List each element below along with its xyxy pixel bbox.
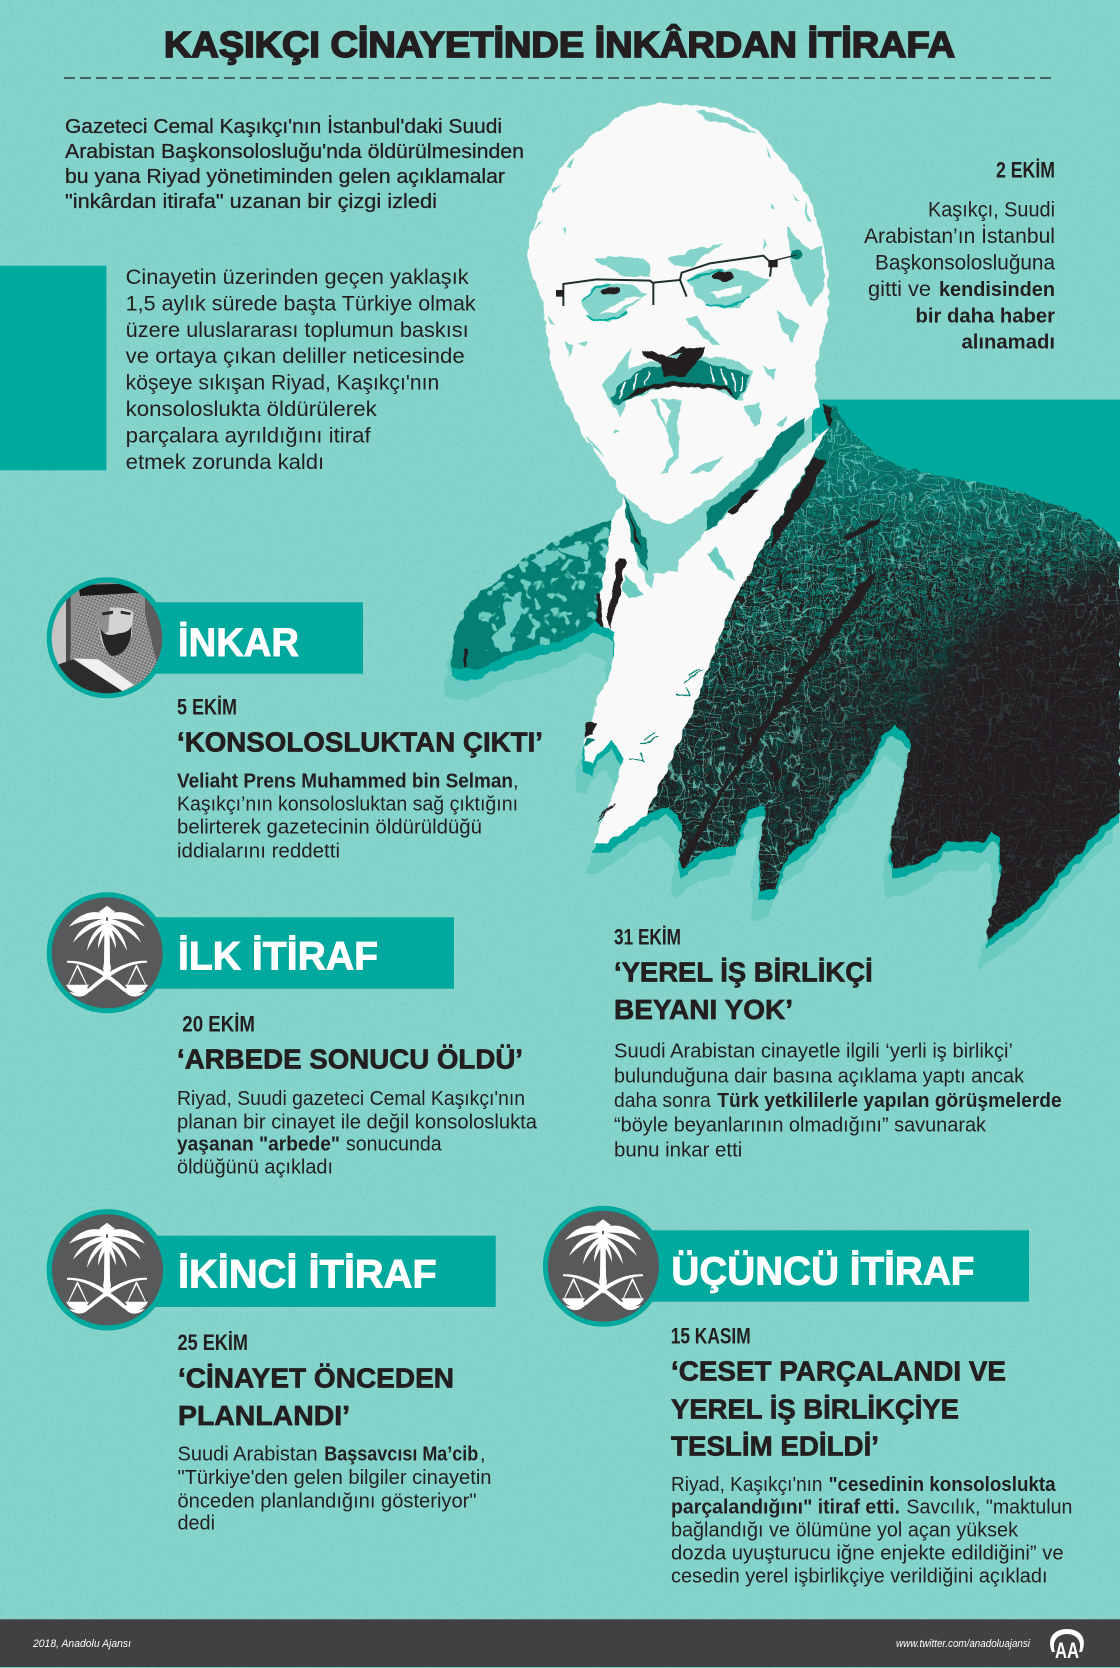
nose [643, 347, 707, 377]
body: daha sonra [614, 1090, 712, 1112]
body: "Türkiye'den gelen bilgiler cinayetin [178, 1467, 492, 1489]
section: ikinci itiraf [47, 1209, 496, 1534]
body: cesedin yerel işbirlikçiye verildiğini açıkladı [671, 1565, 1048, 1587]
body: öldüğünü açıkladı [177, 1156, 333, 1178]
eyes and temple [601, 271, 734, 295]
2 EKIM block: Kaşıkçı, Suudi [928, 199, 1055, 222]
lead paragraph: konsoloslukta öldürülerek [126, 398, 377, 421]
ucuncu itiraf heading: ÜÇÜNCÜ İTİRAF [671, 1248, 974, 1293]
section: ucuncu itiraf [543, 1206, 1072, 1587]
2 EKIM block: alınamadı [962, 332, 1055, 354]
url: www.twitter.com/anadoluajansi [896, 1638, 1030, 1650]
body: dozda uyuşturucu iğne enjekte edildiğini” ve [671, 1542, 1064, 1564]
ilk itiraf banner [150, 917, 454, 989]
body: Savcılık, "maktulun [906, 1496, 1072, 1518]
subheading: YEREL İŞ BİRLİKÇİYE [671, 1393, 959, 1424]
lead paragraph: ve ortaya çıkan deliller neticesinde [126, 345, 465, 368]
title: KAŞIKÇI CİNAYETİNDE İNKÂRDAN İTİRAFA [164, 23, 955, 65]
lead paragraph: etmek zorunda kaldı [126, 451, 324, 474]
AA logo [1050, 1629, 1084, 1663]
body [614, 1041, 1062, 1162]
emblem badge [47, 892, 168, 1013]
subheading: PLANLANDI’ [178, 1400, 350, 1431]
lens shading [582, 269, 750, 320]
2 EKIM block: kendisinden [939, 279, 1055, 301]
portrait painted layers [444, 104, 1120, 970]
ikinci itiraf heading: İKİNCİ İTİRAF [178, 1252, 437, 1296]
jacket left [452, 520, 612, 671]
body: , [513, 771, 519, 793]
body: dedi [178, 1512, 215, 1534]
date: 25 EKİM [178, 1330, 248, 1355]
subheading: ‘CESET PARÇALANDI VE [671, 1356, 1006, 1387]
body: parçalandığını" itiraf etti. [671, 1496, 900, 1518]
teal block left [0, 266, 106, 470]
emblem badge [47, 1209, 168, 1331]
face shading [533, 110, 825, 475]
subheading: ‘YEREL İŞ BİRLİKÇİ [614, 957, 873, 988]
2 EKIM block: Başkonsolosluğuna [875, 251, 1055, 274]
shirt logo marks [597, 669, 702, 822]
intro text: Arabistan Başkonsolosluğu'nda öldürülmesinden [65, 141, 524, 163]
body [177, 771, 519, 863]
inkar portrait badge [47, 577, 168, 703]
footer [0, 1619, 1120, 1667]
date: 20 EKİM [182, 1012, 255, 1037]
section: 31 ekim [614, 924, 1062, 1162]
intro text: Gazeteci Cemal Kaşıkçı'nın İstanbul'daki Suudi [65, 115, 502, 138]
2 EKIM block: bir daha haber [916, 306, 1055, 328]
body: Riyad, Suudi gazeteci Cemal Kaşıkçı'nın [177, 1088, 525, 1110]
inkar heading: İNKAR [178, 621, 299, 665]
moustache [610, 362, 750, 407]
body: , [480, 1444, 486, 1466]
inkar banner [150, 602, 363, 674]
body: Veliaht Prens Muhammed bin Selman [177, 771, 513, 793]
emblem badge [543, 1206, 664, 1327]
section: ilk itiraf [47, 892, 538, 1178]
subheading: BEYANI YOK’ [614, 994, 793, 1025]
body: Suudi Arabistan [178, 1444, 318, 1466]
lead paragraph [126, 266, 476, 474]
neck shadow [706, 416, 805, 532]
body: Türk yetkililerle yapılan görüşmelerde [717, 1090, 1062, 1112]
ucuncu itiraf banner [646, 1230, 1029, 1302]
ilk itiraf heading: İLK İTİRAF [178, 934, 378, 978]
date: 5 EKİM [177, 694, 237, 719]
2 EKIM block: gitti ve [868, 278, 931, 301]
body: planan bir cinayet ile değil konsoloslukta [177, 1111, 538, 1133]
under-eye highlights [598, 285, 743, 427]
ikinci itiraf banner [150, 1236, 496, 1307]
body: "cesedinin konsoloslukta [829, 1474, 1056, 1496]
AA logo: AA [1055, 1638, 1079, 1663]
teal block right behind shoulder [812, 400, 1120, 542]
subheading: ‘ARBEDE SONUCU ÖLDÜ’ [177, 1043, 523, 1074]
lead paragraph: üzere uluslararası toplumun baskısı [126, 319, 469, 342]
portrait shadows [444, 414, 1119, 970]
intro text: "inkârdan itirafa" uzanan bir çizgi izledi [65, 191, 437, 213]
intro text: bu yana Riyad yönetiminden gelen açıklamalar [65, 166, 505, 188]
body: bağlandığı ve ölümüne yol açan yüksek [671, 1520, 1019, 1542]
body: Riyad, Kaşıkçı'nın [671, 1474, 822, 1496]
2 EKIM block [864, 158, 1055, 354]
subheading: TESLİM EDİLDİ’ [671, 1431, 879, 1462]
subheading [671, 1356, 1006, 1462]
body [177, 1088, 538, 1178]
subheading [178, 1362, 454, 1431]
body [178, 1444, 492, 1534]
subheading [614, 957, 873, 1025]
lead paragraph: Cinayetin üzerinden geçen yaklaşık [126, 266, 469, 289]
lead paragraph: köşeye sıkışan Riyad, Kaşıkçı'nın [126, 372, 439, 394]
glasses [556, 255, 797, 306]
body: bulunduğuna dair basına açıklama yaptı ancak [614, 1065, 1025, 1087]
head [528, 104, 828, 525]
body: bunu inkar etti [614, 1140, 742, 1162]
2 EKIM block: 2 EKİM [996, 158, 1055, 183]
credit: 2018, Anadolu Ajansı [32, 1638, 131, 1650]
subheading: ‘KONSOLOSLUKTAN ÇIKTI’ [177, 727, 543, 758]
lead paragraph: 1,5 aylık sürede başta Türkiye olmak [126, 292, 476, 316]
portrait illustration [444, 104, 1120, 970]
section: inkar [47, 577, 543, 863]
date: 31 EKİM [614, 924, 681, 949]
body: Kaşıkçı’nın konsolosluktan sağ çıktığını [177, 794, 518, 816]
body: önceden planlandığını gösteriyor" [178, 1490, 476, 1512]
body [671, 1474, 1072, 1587]
body: yaşanan "arbede" [177, 1134, 340, 1156]
body: belirterek gazetecinin öldürüldüğü [177, 816, 482, 838]
shirt [582, 427, 829, 843]
body: Başsavcısı Ma’cib [324, 1444, 478, 1466]
body: sonucunda [346, 1134, 443, 1156]
2 EKIM block: Arabistan’ın İstanbul [864, 225, 1055, 248]
body: “böyle beyanlarının olmadığını” savunarak [614, 1115, 987, 1137]
intro text [65, 115, 524, 213]
date: 15 KASIM [671, 1323, 751, 1348]
lead paragraph: parçalara ayrıldığını itiraf [126, 424, 371, 448]
body: iddialarını reddetti [177, 841, 340, 863]
jacket right [640, 400, 1120, 970]
subheading: ‘CİNAYET ÖNCEDEN [178, 1362, 454, 1393]
body: Suudi Arabistan cinayetle ilgili ‘yerli iş birlikçi’ [614, 1041, 1013, 1063]
